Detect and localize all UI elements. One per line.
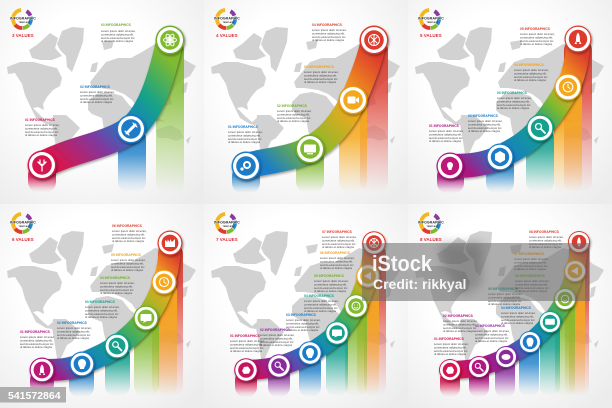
- heading: 3 values: 3 VALUES: [12, 33, 34, 38]
- node 01: [436, 152, 464, 180]
- text block 02: Lorem ipsum dolor sit amet,: [80, 90, 115, 94]
- node 03: [104, 334, 130, 358]
- text block 03: consectetur adipiscing elit,: [286, 321, 319, 325]
- text block 01: consectetur adipiscing elit,: [230, 342, 263, 346]
- text block 02: consectetur adipiscing elit,: [80, 93, 113, 97]
- text block 05: Lorem ipsum dolor sit amet,: [520, 32, 555, 36]
- text block 01: sed do eiusmod tempor inc: [434, 349, 468, 353]
- text block 04: [514, 63, 549, 82]
- node 02: [267, 354, 291, 378]
- text block 03: sed do eiusmod tempor inc: [475, 336, 509, 340]
- text block 04: 04 INFOGRAPHICS: [514, 63, 545, 67]
- text block 02: ut labore et dolore magna: [468, 129, 500, 133]
- text block 01: ut labore et dolore magna: [25, 133, 57, 137]
- node 01: [30, 358, 54, 382]
- node 07: [564, 260, 586, 282]
- text block 03: ut labore et dolore magna: [101, 39, 133, 43]
- text block 08: ut labore et dolore magna: [529, 245, 561, 249]
- text block 06: Lorem ipsum dolor sit amet,: [515, 279, 550, 283]
- text block 05: ut labore et dolore magna: [501, 321, 533, 325]
- text block 07: Lorem ipsum dolor sit amet,: [322, 235, 357, 239]
- text block 06: [320, 251, 355, 270]
- text block 07: consectetur adipiscing elit,: [322, 238, 355, 242]
- node 01: [232, 152, 260, 180]
- node 05: [564, 26, 592, 52]
- text block 03: Lorem ipsum dolor sit amet,: [101, 29, 136, 33]
- heading: 8 values: 8 VALUES: [420, 237, 442, 242]
- text block 05: Lorem ipsum dolor sit amet,: [111, 258, 146, 262]
- text block 06: 06 INFOGRAPHICS: [515, 274, 546, 278]
- text block 02: 02 INFOGRAPHICS: [57, 321, 88, 325]
- text block 04: consectetur adipiscing elit,: [100, 284, 133, 288]
- node 02: [116, 114, 146, 144]
- ribbon curve: [246, 243, 374, 370]
- text block 01: [434, 337, 469, 356]
- text block 02: [260, 328, 295, 347]
- node 03: [526, 114, 554, 142]
- text block 04: ut labore et dolore magna: [312, 38, 344, 42]
- text block 04: [304, 294, 339, 313]
- text block 02: [468, 114, 503, 133]
- text block 08: 08 INFOGRAPHICS: [529, 230, 560, 234]
- text block 02: 02 INFOGRAPHICS: [443, 314, 474, 318]
- text block 07: 07 INFOGRAPHICS: [322, 230, 353, 234]
- text block 04: Lorem ipsum dolor sit amet,: [488, 292, 523, 296]
- text block 05: consectetur adipiscing elit,: [520, 35, 553, 39]
- text block 04: consectetur adipiscing elit,: [514, 71, 547, 75]
- text block 06: consectetur adipiscing elit,: [320, 259, 353, 263]
- text block 01: 01 INFOGRAPHICS: [25, 118, 56, 122]
- text block 05: ut labore et dolore magna: [111, 268, 143, 272]
- logo: [9, 210, 36, 236]
- ribbon curve: [42, 243, 170, 370]
- text block 06: sed do eiusmod tempor inc: [320, 263, 354, 267]
- text block 02: Lorem ipsum dolor sit amet,: [260, 333, 295, 337]
- text block 02: [57, 321, 92, 340]
- node 04: [519, 331, 541, 353]
- text block 03: ut labore et dolore magna: [304, 80, 336, 84]
- text block 05: ut labore et dolore magna: [520, 42, 552, 46]
- logo: [417, 210, 444, 236]
- text block 03: Lorem ipsum dolor sit amet,: [304, 70, 339, 74]
- node 03: [156, 26, 184, 54]
- text block 01: ut labore et dolore magna: [230, 349, 262, 353]
- text block 03: [304, 65, 339, 84]
- text block 02: Lorem ipsum dolor sit amet,: [277, 109, 312, 113]
- watermark band: iStock: [372, 251, 433, 276]
- text block 07: consectetur adipiscing elit,: [514, 260, 547, 264]
- text block 03: Lorem ipsum dolor sit amet,: [475, 329, 510, 333]
- text block 04: ut labore et dolore magna: [100, 291, 132, 295]
- text block 04: ut labore et dolore magna: [304, 309, 336, 313]
- text block 04: [312, 23, 347, 42]
- heading: 6 values: 6 VALUES: [12, 237, 34, 242]
- ribbon curve: [450, 242, 579, 370]
- image id badge: 541572864: [8, 390, 61, 402]
- text block 04: sed do eiusmod tempor inc: [100, 288, 134, 292]
- node 06: [356, 264, 380, 288]
- text block 02: consectetur adipiscing elit,: [468, 122, 501, 126]
- logo: [213, 210, 240, 236]
- text block 02: sed do eiusmod tempor inc: [57, 333, 91, 337]
- text block 02: consectetur adipiscing elit,: [260, 336, 293, 340]
- text block 02: Lorem ipsum dolor sit amet,: [443, 319, 478, 323]
- text block 02: sed do eiusmod tempor inc: [80, 97, 114, 101]
- text block 02: Lorem ipsum dolor sit amet,: [468, 119, 503, 123]
- text block 03: ut labore et dolore magna: [497, 106, 529, 110]
- text block 04: ut labore et dolore magna: [488, 302, 520, 306]
- panel: 7 values: [204, 204, 408, 408]
- text block 02: [80, 85, 115, 104]
- text block 01: 01 INFOGRAPHICS: [434, 337, 465, 341]
- text block 01: sed do eiusmod tempor inc: [429, 136, 463, 140]
- text block 06: [515, 274, 550, 293]
- text block 01: ut labore et dolore magna: [228, 140, 260, 144]
- text block 01: 01 INFOGRAPHICS: [230, 334, 261, 338]
- text block 05: [501, 306, 536, 325]
- text block 03: sed do eiusmod tempor inc: [304, 77, 338, 81]
- text block 02: consectetur adipiscing elit,: [443, 322, 476, 326]
- text block 05: sed do eiusmod tempor inc: [520, 39, 554, 43]
- text block 04: Lorem ipsum dolor sit amet,: [514, 68, 549, 72]
- text block 01: consectetur adipiscing elit,: [429, 132, 462, 136]
- text block 07: 07 INFOGRAPHICS: [514, 252, 545, 256]
- text block 07: ut labore et dolore magna: [322, 245, 354, 249]
- text block 05: 05 INFOGRAPHICS: [520, 27, 551, 31]
- text block 01: Lorem ipsum dolor sit amet,: [434, 342, 469, 346]
- text block 02: [277, 104, 312, 123]
- text block 03: ut labore et dolore magna: [475, 339, 507, 343]
- text block 01: [230, 334, 265, 353]
- text block 03: consectetur adipiscing elit,: [475, 332, 508, 336]
- heading: 4 values: 4 VALUES: [216, 33, 238, 38]
- text block 04: consectetur adipiscing elit,: [488, 295, 521, 299]
- text block 05: consectetur adipiscing elit,: [111, 261, 144, 265]
- text block 02: Lorem ipsum dolor sit amet,: [57, 326, 92, 330]
- text block 04: Lorem ipsum dolor sit amet,: [100, 281, 135, 285]
- text block 02: ut labore et dolore magna: [80, 100, 112, 104]
- text block 06: ut labore et dolore magna: [112, 239, 144, 243]
- node 04: [134, 306, 158, 330]
- watermark band: Credit: rikkyal: [373, 276, 466, 292]
- text block 06: Lorem ipsum dolor sit amet,: [320, 256, 355, 260]
- text block 03: sed do eiusmod tempor inc: [101, 36, 135, 40]
- text block 03: [475, 324, 510, 343]
- text block 01: sed do eiusmod tempor inc: [25, 130, 59, 134]
- text block 07: [322, 230, 357, 249]
- bar columns: [440, 242, 589, 397]
- text block 02: ut labore et dolore magna: [277, 119, 309, 123]
- text block 05: sed do eiusmod tempor inc: [501, 318, 535, 322]
- panel: 8 values: [408, 204, 612, 408]
- text block 05: Lorem ipsum dolor sit amet,: [314, 279, 349, 283]
- node 02: [296, 134, 324, 164]
- text block 04: consectetur adipiscing elit,: [304, 302, 337, 306]
- text block 04: sed do eiusmod tempor inc: [304, 306, 338, 310]
- text block 02: consectetur adipiscing elit,: [277, 112, 310, 116]
- panel: 4 values: [204, 0, 408, 204]
- node 02: [70, 352, 94, 376]
- text block 05: consectetur adipiscing elit,: [501, 314, 534, 318]
- text block 03: sed do eiusmod tempor inc: [85, 312, 119, 316]
- text block 05: 05 INFOGRAPHICS: [111, 253, 142, 257]
- bar columns: [232, 40, 388, 193]
- text block 01: 01 INFOGRAPHICS: [228, 125, 259, 129]
- text block 03: 03 INFOGRAPHICS: [497, 91, 528, 95]
- text block 03: 03 INFOGRAPHICS: [304, 65, 335, 69]
- text block 03: Lorem ipsum dolor sit amet,: [497, 96, 532, 100]
- node 03: [495, 346, 517, 368]
- text block 07: Lorem ipsum dolor sit amet,: [514, 257, 549, 261]
- text block 08: sed do eiusmod tempor inc: [529, 242, 563, 246]
- text block 03: consectetur adipiscing elit,: [304, 73, 337, 77]
- text block 04: 04 INFOGRAPHICS: [100, 276, 131, 280]
- node 06: [158, 230, 182, 256]
- heading: 7 values: 7 VALUES: [216, 237, 238, 242]
- text block 04: 04 INFOGRAPHICS: [304, 294, 335, 298]
- node 05: [344, 294, 368, 318]
- logo: [417, 6, 444, 32]
- text block 01: 01 INFOGRAPHICS: [20, 330, 51, 334]
- text block 08: consectetur adipiscing elit,: [529, 238, 562, 242]
- text block 01: [25, 118, 60, 137]
- text block 03: Lorem ipsum dolor sit amet,: [85, 305, 120, 309]
- text block 06: ut labore et dolore magna: [320, 266, 352, 270]
- text block 05: Lorem ipsum dolor sit amet,: [501, 311, 536, 315]
- text block 04: Lorem ipsum dolor sit amet,: [312, 28, 347, 32]
- text block 04: [488, 287, 523, 306]
- text block 05: 05 INFOGRAPHICS: [314, 274, 345, 278]
- text block 01: ut labore et dolore magna: [429, 139, 461, 143]
- text block 02: consectetur adipiscing elit,: [57, 329, 90, 333]
- text block 01: consectetur adipiscing elit,: [20, 338, 53, 342]
- text block 01: [228, 125, 263, 144]
- text block 03: ut labore et dolore magna: [286, 328, 318, 332]
- text block 04: consectetur adipiscing elit,: [312, 31, 345, 35]
- text block 03: 03 INFOGRAPHICS: [85, 300, 116, 304]
- text block 02: sed do eiusmod tempor inc: [443, 326, 477, 330]
- text block 02: 02 INFOGRAPHICS: [80, 85, 111, 89]
- text block 02: [443, 314, 478, 333]
- text block 05: [111, 253, 146, 272]
- text block 01: sed do eiusmod tempor inc: [230, 346, 264, 350]
- node 03: [298, 341, 322, 365]
- node 03: [338, 86, 368, 114]
- panel: 6 values: [0, 204, 204, 408]
- text block 01: Lorem ipsum dolor sit amet,: [230, 339, 265, 343]
- text block 01: sed do eiusmod tempor inc: [228, 137, 262, 141]
- text block 03: consectetur adipiscing elit,: [101, 32, 134, 36]
- node 01: [439, 359, 461, 381]
- bar columns: [437, 40, 592, 193]
- panel: 3 values: [0, 0, 204, 204]
- node 04: [554, 74, 582, 100]
- text block 02: 02 INFOGRAPHICS: [277, 104, 308, 108]
- bar columns: [28, 40, 184, 192]
- text block 04: 04 INFOGRAPHICS: [312, 23, 343, 27]
- text block 06: sed do eiusmod tempor inc: [515, 286, 549, 290]
- text block 06: 06 INFOGRAPHICS: [112, 224, 143, 228]
- logo: [213, 6, 240, 32]
- image id badge: [0, 387, 66, 402]
- text block 05: 04 INFOGRAPHICS: [501, 306, 532, 310]
- text block 03: [101, 23, 136, 43]
- text block 02: ut labore et dolore magna: [443, 329, 475, 333]
- text block 03: sed do eiusmod tempor inc: [497, 103, 531, 107]
- text block 06: consectetur adipiscing elit,: [515, 282, 548, 286]
- text block 06: [112, 224, 147, 243]
- text block 01: [429, 124, 464, 143]
- text block 01: Lorem ipsum dolor sit amet,: [228, 130, 263, 134]
- text block 03: ut labore et dolore magna: [85, 315, 117, 319]
- node 05: [152, 270, 176, 294]
- text block 04: ut labore et dolore magna: [514, 78, 546, 82]
- text block 06: consectetur adipiscing elit,: [112, 232, 145, 236]
- heading: 5 values: 5 VALUES: [420, 33, 442, 38]
- watermark band: [362, 243, 590, 301]
- text block 02: ut labore et dolore magna: [260, 343, 292, 347]
- text block 03: consectetur adipiscing elit,: [85, 308, 118, 312]
- text block 03: Lorem ipsum dolor sit amet,: [286, 318, 321, 322]
- watermark: dark map patch: [438, 243, 482, 296]
- text block 01: consectetur adipiscing elit,: [228, 133, 261, 137]
- text block 03: 03 INFOGRAPHICS: [286, 313, 317, 317]
- ribbon curve: [246, 40, 374, 166]
- node 02: [486, 144, 514, 170]
- text block 06: Lorem ipsum dolor sit amet,: [112, 229, 147, 233]
- text block 07: sed do eiusmod tempor inc: [514, 264, 548, 268]
- node 01: [28, 150, 56, 180]
- text block 05: sed do eiusmod tempor inc: [111, 265, 145, 269]
- text block 04: sed do eiusmod tempor inc: [488, 299, 522, 303]
- text block 02: sed do eiusmod tempor inc: [260, 340, 294, 344]
- text block 06: sed do eiusmod tempor inc: [112, 236, 146, 240]
- text block 04: sed do eiusmod tempor inc: [514, 75, 548, 79]
- text block 01: Lorem ipsum dolor sit amet,: [25, 123, 60, 127]
- text block 06: ut labore et dolore magna: [515, 289, 547, 293]
- text block 03: 03 INFOGRAPHICS: [101, 23, 132, 27]
- node 04: [325, 321, 349, 345]
- text block 07: ut labore et dolore magna: [514, 267, 546, 271]
- text block 07: sed do eiusmod tempor inc: [322, 242, 356, 246]
- ribbon curve: [42, 40, 170, 165]
- node 07: [362, 231, 386, 255]
- ribbon curve: [450, 39, 578, 166]
- text block 02: sed do eiusmod tempor inc: [277, 116, 311, 120]
- text block 02: 02 INFOGRAPHICS: [468, 114, 499, 118]
- text block 05: [314, 274, 349, 293]
- node 04: [360, 26, 388, 54]
- text block 01: consectetur adipiscing elit,: [25, 126, 58, 130]
- text block 02: ut labore et dolore magna: [57, 336, 89, 340]
- text block 02: 02 INFOGRAPHICS: [260, 328, 291, 332]
- text block 03: [85, 300, 120, 319]
- text block 03: sed do eiusmod tempor inc: [286, 325, 320, 329]
- text block 08: [529, 230, 564, 249]
- bar columns: [30, 244, 183, 397]
- text block 08: Lorem ipsum dolor sit amet,: [529, 235, 564, 239]
- node 05: [539, 311, 561, 333]
- node 06: [554, 288, 576, 310]
- text block 04: Lorem ipsum dolor sit amet,: [304, 299, 339, 303]
- text block 06: 06 INFOGRAPHICS: [320, 251, 351, 255]
- text block 03: 03 INFOGRAPHICS: [475, 324, 506, 328]
- text block 01: sed do eiusmod tempor inc: [20, 342, 54, 346]
- text block 01: Lorem ipsum dolor sit amet,: [429, 129, 464, 133]
- text block 01: 01 INFOGRAPHICS: [429, 124, 460, 128]
- node 01: [234, 358, 258, 382]
- text block 01: ut labore et dolore magna: [20, 345, 52, 349]
- text block 04: sed do eiusmod tempor inc: [312, 35, 346, 39]
- text block 03: [497, 91, 532, 110]
- text block 03: consectetur adipiscing elit,: [497, 99, 530, 103]
- text block 05: ut labore et dolore magna: [314, 289, 346, 293]
- panel: 5 values: [408, 0, 612, 204]
- text block 01: consectetur adipiscing elit,: [434, 345, 467, 349]
- text block 07: [514, 252, 549, 271]
- text block 05: sed do eiusmod tempor inc: [314, 286, 348, 290]
- text block 01: [20, 330, 55, 349]
- text block 04: 05 INFOGRAPHICS: [488, 287, 519, 291]
- text block 03: [286, 313, 321, 332]
- text block 05: [520, 27, 555, 46]
- text block 02: sed do eiusmod tempor inc: [468, 126, 502, 130]
- text block 05: consectetur adipiscing elit,: [314, 282, 347, 286]
- bar columns: [235, 244, 386, 397]
- node 02: [468, 356, 490, 378]
- text block 01: ut labore et dolore magna: [434, 352, 466, 356]
- text block 01: Lorem ipsum dolor sit amet,: [20, 335, 55, 339]
- logo: [9, 6, 36, 32]
- node 08: [568, 231, 590, 253]
- text block 04: [100, 276, 135, 295]
